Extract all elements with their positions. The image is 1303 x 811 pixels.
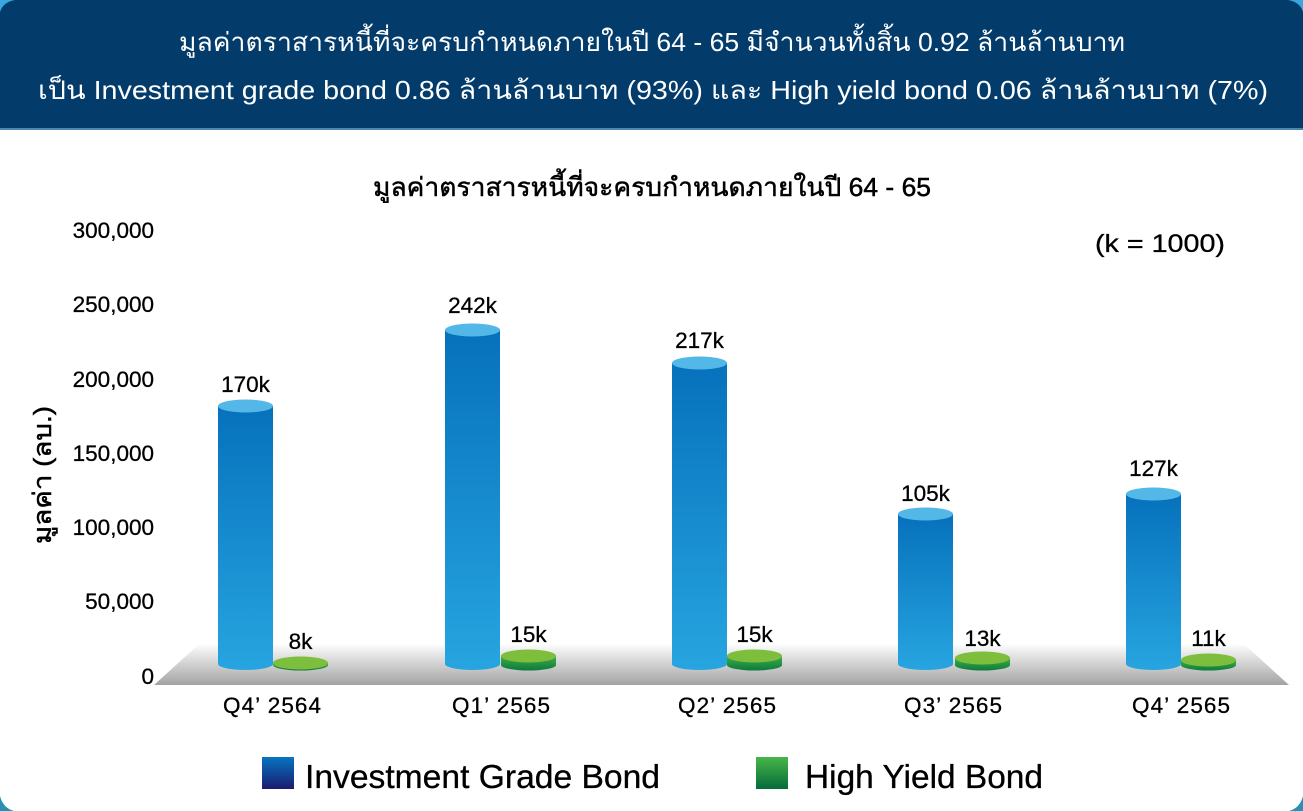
header line 1: มูลค่าตราสารหนี้ที่จะครบกำหนดภายในปี 64 - 65 มีจำนวนทั้งสิ้น 0.92 ล้านล้านบาท	[179, 23, 1125, 58]
x axis labels: Q4’ 2565	[1132, 693, 1230, 718]
legend swatch: high yield	[756, 757, 788, 789]
unit note: (k = 1000)	[1095, 230, 1225, 258]
bar: Q2 2565 high yield: 15k	[736, 622, 773, 647]
header banner	[0, 0, 1303, 130]
bar: Q3 2565 high yield: 13k	[964, 626, 1001, 651]
bar: Q4 2564 investment grade: 170k	[221, 372, 271, 397]
bar: Q2 2565 investment grade: 217k	[675, 328, 725, 353]
bar: Q3 2565 investment grade	[898, 481, 953, 670]
x axis labels: Q2’ 2565	[678, 693, 776, 718]
legend label: investment grade: Investment Grade Bond	[305, 758, 660, 795]
bar: Q2 2565 high yield	[727, 622, 782, 670]
bar: Q4 2564 high yield	[273, 629, 328, 670]
bar: Q1 2565 investment grade	[445, 293, 500, 670]
y axis labels: 300,000	[73, 218, 154, 243]
chart floor	[154, 645, 1289, 685]
bar: Q4 2565 investment grade: 127k	[1129, 456, 1179, 481]
legend swatch: investment grade	[262, 757, 294, 789]
bar: Q4 2564 high yield: 8k	[289, 629, 313, 654]
bar: Q3 2565 high yield	[955, 626, 1010, 670]
y axis title: มูลค่า (ลบ.)	[29, 406, 58, 544]
bar: Q4 2564 investment grade	[218, 372, 273, 670]
chart title: มูลค่าตราสารหนี้ที่จะครบกำหนดภายในปี 64 - 65	[373, 168, 931, 203]
y axis labels: 100,000	[73, 515, 154, 540]
y axis labels: 50,000	[85, 589, 154, 614]
bar: Q1 2565 high yield	[501, 622, 556, 670]
header line 2: เป็น Investment grade bond 0.86 ล้านล้านบาท (93%) และ High yield bond 0.06 ล้านล้านบาท (7%)	[38, 74, 1268, 105]
y axis labels: 250,000	[73, 292, 154, 317]
bars	[218, 293, 1236, 670]
bar: Q4 2565 investment grade	[1126, 456, 1181, 670]
x axis labels: Q3’ 2565	[904, 693, 1002, 718]
bar: Q4 2565 high yield: 11k	[1191, 626, 1227, 651]
bar: Q1 2565 investment grade: 242k	[448, 293, 498, 318]
x axis labels	[223, 693, 1230, 718]
y axis labels	[73, 218, 154, 689]
y axis labels: 200,000	[73, 367, 154, 392]
y axis labels: 150,000	[73, 441, 154, 466]
bar: Q1 2565 high yield: 15k	[510, 622, 547, 647]
legend label: high yield: High Yield Bond	[805, 758, 1043, 795]
bar: Q4 2565 high yield	[1181, 626, 1236, 670]
legend	[262, 757, 1043, 795]
bar: Q2 2565 investment grade	[672, 328, 727, 670]
bar: Q3 2565 investment grade: 105k	[901, 481, 951, 506]
y axis labels: 0	[141, 664, 154, 689]
x axis labels: Q4’ 2564	[223, 693, 321, 718]
x axis labels: Q1’ 2565	[452, 693, 550, 718]
